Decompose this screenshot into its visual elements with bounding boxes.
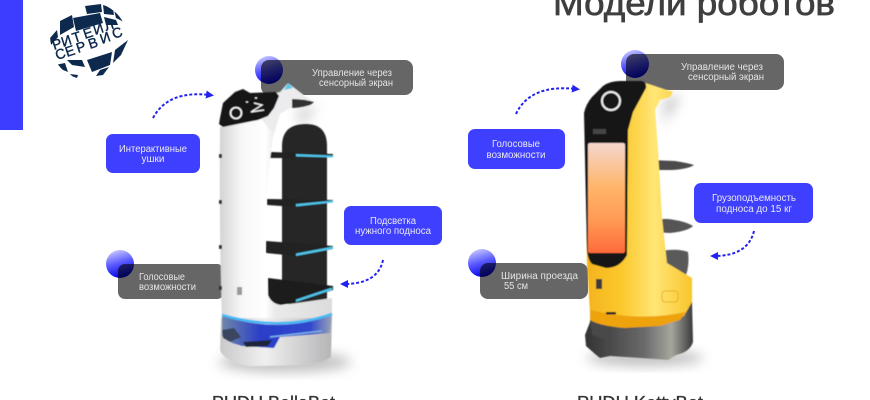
arrow: to head	[516, 88, 576, 114]
body	[220, 105, 332, 320]
callout: touch control (BellaBot): Управление через	[312, 68, 392, 79]
callout: touch control (BellaBot): сенсорный экран	[319, 78, 393, 89]
callout: passage width: Ширина проезда	[501, 271, 578, 282]
callout: voice (BellaBot): возможности	[139, 282, 196, 293]
callout: voice (BellaBot): Голосовые	[139, 272, 185, 283]
logo: globe: СЕРВИС	[53, 23, 125, 63]
logo: globe	[50, 4, 128, 78]
callout: tray capacity	[694, 183, 813, 223]
callout: voice (KettyBot): Голосовые	[492, 139, 540, 150]
callout: tray capacity: подноса до 15 кг	[716, 204, 792, 215]
body	[585, 83, 692, 327]
logo wordmark: РИТЕЙЛ	[50, 16, 116, 53]
callout: tray highlight	[344, 206, 442, 245]
callout: voice (BellaBot)	[106, 250, 224, 299]
callout: passage width	[468, 249, 588, 299]
callout: voice (KettyBot)	[468, 129, 565, 169]
callout: tray capacity: Грузоподъемность	[712, 193, 796, 204]
arrow: to ears	[153, 94, 210, 118]
callout: touch control (KettyBot): Управление через	[681, 62, 763, 73]
arrow: to tray	[344, 260, 383, 284]
robot: BellaBot	[219, 83, 351, 372]
callout: touch control (KettyBot): сенсорный экран	[688, 72, 764, 83]
callout: interactive ears: ушки	[142, 154, 164, 165]
head screen	[219, 89, 279, 127]
callout: interactive ears: Интерактивные	[119, 144, 187, 155]
arrow: to tray capacity	[714, 231, 754, 256]
base	[220, 318, 332, 366]
callout: tray highlight: нужного подноса	[355, 226, 431, 237]
head arm	[262, 83, 313, 134]
accent bar	[0, 0, 23, 130]
screen	[588, 143, 625, 253]
callout: tray highlight: Подсветка	[370, 216, 416, 227]
callout: touch control (KettyBot)	[621, 50, 784, 90]
trays	[266, 152, 333, 306]
callout: interactive ears	[106, 134, 200, 173]
tray tower	[282, 124, 327, 304]
head	[584, 81, 646, 268]
robot: KettyBot	[584, 81, 703, 366]
callout: voice (KettyBot): возможности	[486, 150, 546, 161]
trays	[650, 160, 694, 282]
callout: passage width: 55 см	[504, 281, 528, 292]
base	[585, 300, 693, 360]
callout: touch control (BellaBot)	[255, 56, 413, 95]
